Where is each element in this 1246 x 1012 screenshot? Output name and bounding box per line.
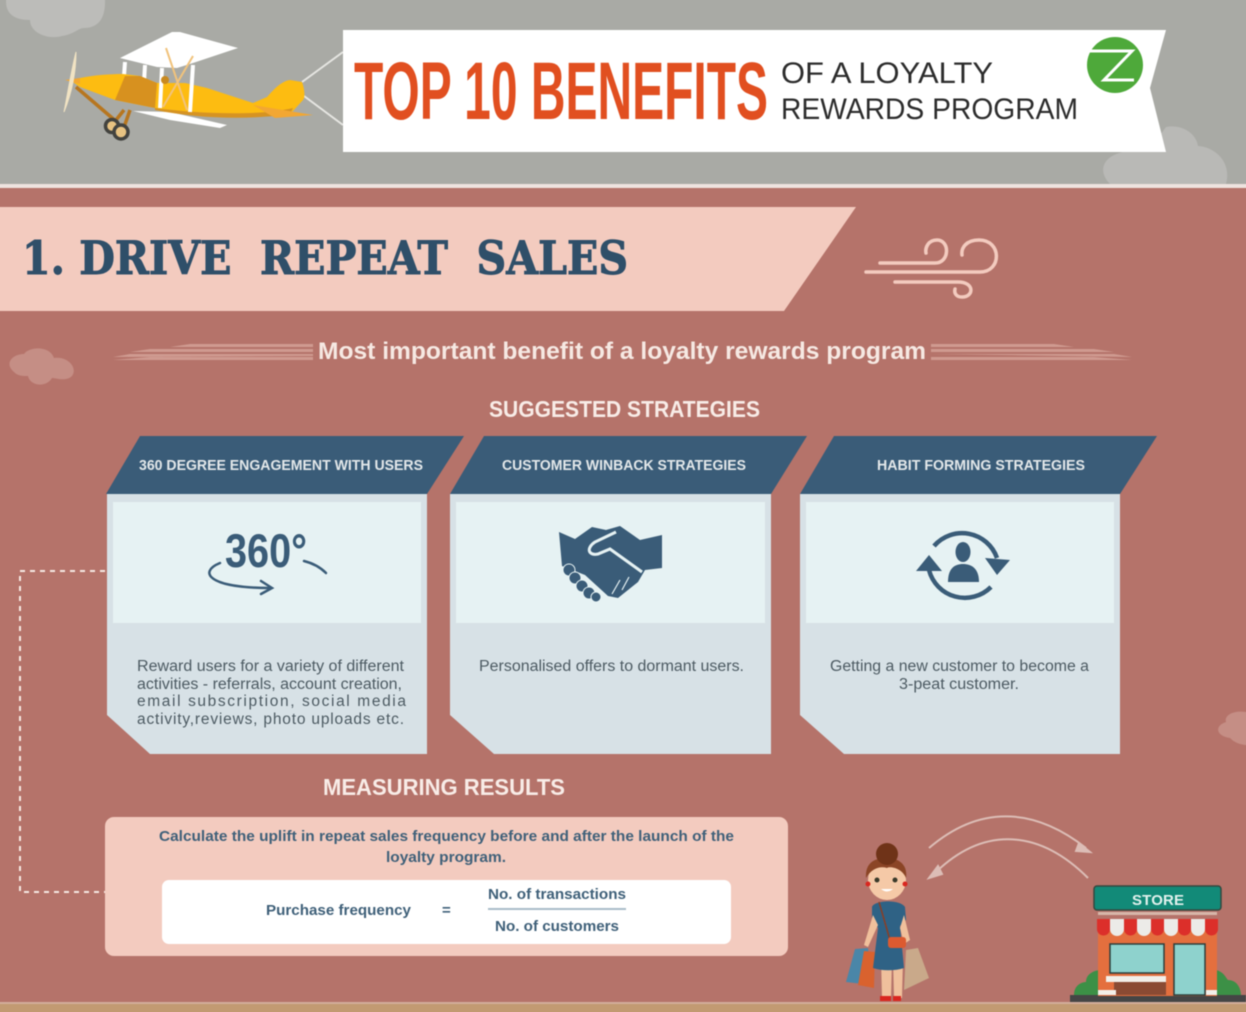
tow ropes (302, 52, 343, 125)
panel: measuring results: Calculate the uplift in repeat sales frequency before and after the launch of the (159, 828, 734, 845)
cloud bottom right (1103, 126, 1227, 184)
icon: wind (866, 240, 996, 297)
section heading banner (0, 207, 856, 311)
panel: 360 degree engagement: email subscription, social media (137, 693, 406, 710)
arrows between customer and store (929, 816, 1090, 878)
panel: 360 degree engagement: activities - referrals, account creation, (137, 676, 402, 693)
illustration: shopper (846, 843, 929, 1001)
formula: = (442, 902, 451, 919)
subtitle: of a loyalty rewards program: REWARDS PROGRAM (781, 93, 1078, 126)
logo: Z in green circle (1085, 37, 1143, 93)
title: top 10 benefits: TOP 10 BENEFITS (354, 46, 768, 137)
cloud right edge (1218, 712, 1246, 746)
panel: habit forming: Getting a new customer to become a (830, 658, 1089, 675)
icon: 360 degrees (209, 524, 326, 594)
formula: No. of transactions (488, 886, 626, 903)
panel: 360 degree engagement: 360 DEGREE ENGAGEMENT WITH USERS (139, 458, 423, 474)
icon: biplane (64, 32, 343, 139)
panel: habit forming: HABIT FORMING STRATEGIES (877, 458, 1085, 474)
panel: 360 degree engagement: activity,reviews, photo uploads etc. (137, 711, 404, 728)
panel: measuring results (105, 817, 788, 956)
heading: suggested strategies: SUGGESTED STRATEGIES (489, 396, 760, 422)
illustration: store: STORE (1132, 892, 1184, 909)
icon: handshake (559, 526, 662, 602)
panel: measuring results: loyalty program. (386, 849, 506, 866)
icon: user cycle (916, 533, 1010, 598)
icon: 360 degrees: 360° (225, 524, 307, 577)
panel: customer winback: Personalised offers to dormant users. (479, 658, 744, 675)
panel: habit forming (800, 436, 1157, 754)
section heading: drive repeat sales: 1. DRIVE REPEAT SALES (22, 231, 628, 285)
heading: measuring results: MEASURING RESULTS (323, 774, 565, 800)
formula: No. of customers (495, 918, 619, 935)
panel: customer winback (450, 436, 807, 754)
tagline: Most important benefit of a loyalty rewards program (318, 338, 926, 365)
ground (0, 1002, 1246, 1012)
header sky band (0, 0, 1246, 188)
tagline stripes (113, 344, 1132, 360)
formula (162, 880, 731, 944)
panel: customer winback: CUSTOMER WINBACK STRATEGIES (502, 458, 746, 474)
panel: habit forming: 3-peat customer. (899, 676, 1019, 693)
formula: Purchase frequency (266, 902, 412, 919)
cloud left (9, 348, 74, 385)
subtitle: of a loyalty rewards program: OF A LOYALTY (781, 57, 993, 90)
panel: 360 degree engagement (106, 436, 464, 754)
illustration: store (1070, 886, 1246, 1002)
panel: 360 degree engagement: Reward users for a variety of different (137, 658, 405, 675)
cloud top left (6, 0, 105, 37)
dashed connector (20, 571, 105, 892)
subtitle: of a loyalty rewards program (781, 57, 1078, 126)
title ribbon (343, 30, 1166, 152)
